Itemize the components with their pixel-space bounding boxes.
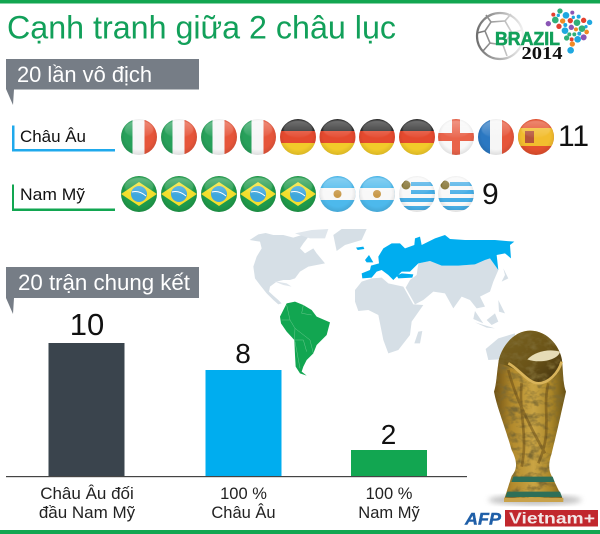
title: Cạnh tranh giữa 2 châu lục — [7, 10, 396, 46]
bar: 100% Châu Âu: Châu Âu — [211, 503, 276, 522]
label: Nam Mỹ — [12, 184, 115, 211]
Europe and Russia — [362, 235, 514, 280]
globe highlight — [527, 350, 560, 361]
banner: 20 lần vô địch: 20 lần vô địch — [17, 62, 152, 87]
Japan and Sakhalin — [502, 268, 508, 282]
bar: Châu Âu đối đầu Nam Mỹ — [39, 307, 136, 522]
row: Nam Mỹ — [12, 176, 499, 212]
icon: football — [477, 13, 523, 59]
banner: 20 trận chung kết — [6, 267, 199, 314]
Iceland — [356, 247, 364, 250]
drapery folds — [508, 370, 548, 467]
count: 11: 11 — [558, 120, 589, 153]
label: Nam Mỹ: Nam Mỹ — [20, 186, 86, 204]
trophy — [488, 328, 582, 505]
base rings — [511, 477, 555, 482]
row: Châu Âu — [12, 119, 589, 155]
logo text: 2014: 2014 — [522, 43, 562, 63]
trophy body — [494, 331, 566, 500]
bar: Châu Âu đối đầu Nam Mỹ: 10 — [70, 307, 104, 342]
bar: 100% Châu Âu — [206, 338, 282, 522]
bar: 100% Nam Mỹ: 2 — [381, 419, 396, 450]
Arctic islands — [295, 229, 328, 238]
trophy shadow — [488, 495, 582, 505]
Southeast Asia islands — [473, 300, 505, 328]
Madagascar — [414, 331, 422, 343]
Australia — [486, 333, 515, 360]
label: Châu Âu — [12, 126, 115, 152]
bar chart — [6, 307, 467, 522]
bar: 100% Nam Mỹ — [351, 419, 427, 522]
trophy globe — [498, 331, 562, 383]
Caribbean — [273, 281, 292, 287]
top green rule — [0, 0, 600, 4]
Turkey — [397, 273, 413, 278]
North America — [250, 233, 325, 304]
Asia — [406, 258, 498, 308]
bar: 100% Nam Mỹ: 100 % — [366, 485, 413, 503]
credit: AFP: AFP — [464, 510, 502, 528]
bar: 100% Nam Mỹ: Nam Mỹ — [358, 504, 420, 522]
bar: 100% Châu Âu: 100 % — [220, 485, 267, 503]
axis line — [6, 476, 467, 477]
mottled metal texture — [494, 332, 566, 498]
logo text: BRAZIL: BRAZIL — [495, 29, 560, 49]
flags: South American champions — [121, 176, 474, 212]
Africa — [355, 278, 423, 353]
Britain — [365, 255, 373, 262]
banner: 20 trận chung kết: 20 trận chung kết — [18, 270, 191, 295]
count: 9: 9 — [482, 178, 499, 211]
bottom green rule — [0, 530, 600, 534]
flags: European champions — [121, 119, 554, 155]
Americas — [250, 229, 367, 376]
Greenland — [333, 229, 367, 251]
Eurasia and Africa — [355, 235, 515, 360]
South America — [280, 302, 330, 376]
shoulder band — [508, 362, 562, 383]
credit: Vietnam+: Vietnam+ — [509, 510, 595, 528]
bar: Châu Âu đối đầu Nam Mỹ: Châu Âu đối — [40, 484, 134, 503]
banner: 20 lần vô địch — [6, 59, 199, 105]
logo: Brazil 2014 — [477, 8, 592, 63]
icon: dotted Brazil map — [546, 8, 592, 54]
bar: Châu Âu đối đầu Nam Mỹ: đầu Nam Mỹ — [39, 503, 136, 522]
world map — [250, 229, 515, 376]
label: Châu Âu: Châu Âu — [20, 127, 86, 146]
bar: 100% Châu Âu: 8 — [235, 338, 251, 369]
